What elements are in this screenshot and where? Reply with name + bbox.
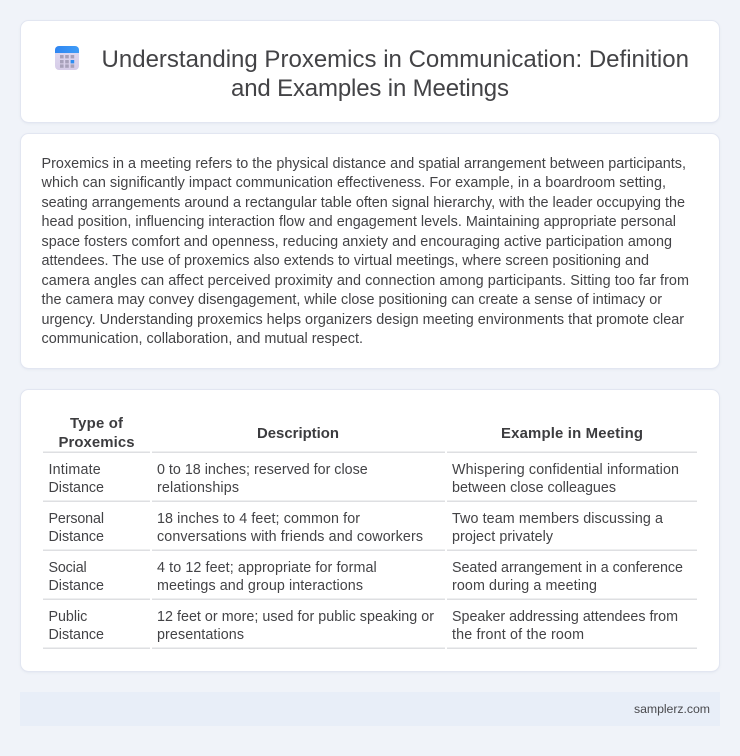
table header row: Proxemics [58,435,134,451]
table row: personal distance: Personal [48,511,104,527]
table row: personal distance: Distance [48,529,104,545]
table header row: Type of [70,416,123,432]
text block: introduction paragraph: the camera may convey disengagement, while close positioning can create a sense of intimacy or [42,292,662,308]
table row: public distance: Distance [48,627,104,643]
text block: introduction paragraph [40,156,689,347]
text block: introduction paragraph: head position, influencing interaction flow and engagement levels. Maintaining appropriate personal [42,214,676,230]
table row: public distance: the front of the room [452,627,584,643]
table row: public distance: Speaker addressing attendees from [452,609,678,625]
table row: social distance: room during a meeting [452,578,597,594]
table row: public distance: Public [48,609,87,625]
title [102,46,689,102]
table row: personal distance: Two team members discussing a [452,511,663,527]
table row: intimate distance: 0 to 18 inches; reserved for close [157,462,368,478]
panel: introduction [20,134,720,368]
text block: introduction paragraph: urgency. Understanding proxemics helps organizers design meeting environments that promote clear [42,312,684,328]
table row: social distance: 4 to 12 feet; appropriate for formal [157,560,377,576]
text block: introduction paragraph: communication, collaboration, and mutual respect. [42,331,363,347]
table row: social distance: Social [48,560,87,576]
title: Understanding Proxemics in Communication: Definition [102,46,689,73]
table row: public distance [43,609,697,649]
icon: calendar [55,46,79,70]
panel: proxemics table [20,390,720,672]
text block: introduction paragraph: camera angles can affect perceived proximity and connection among participants. Sitting too far from [42,273,689,289]
title: and Examples in Meetings [231,75,509,102]
text block: introduction paragraph: attendees. The use of proxemics also extends to virtual meetings, where screen positioning and [42,253,649,269]
footer text: source site: samplerz.com [634,702,710,716]
table header row [43,416,697,453]
text block: introduction paragraph: space fosters comfort and openness, reducing anxiety and encouraging active participation among [42,234,672,250]
table row: personal distance [43,511,697,551]
table header row: Example in Meeting [501,426,643,442]
table row: social distance [43,560,697,600]
table row: intimate distance: between close colleagues [452,480,616,496]
panel: header [20,20,720,122]
table row: social distance: Distance [48,578,104,594]
table row: intimate distance: Distance [48,480,104,496]
table row: personal distance: conversations with friends and coworkers [157,529,423,545]
footer [20,692,720,726]
table row: intimate distance: Intimate [48,462,101,478]
text block: introduction paragraph: seating arrangements around a rectangular table often signal hierarchy, with the leader occupying the [42,195,685,211]
table row: intimate distance: Whispering confidential information [452,462,679,478]
table row: social distance: Seated arrangement in a conference [452,560,683,576]
table row: personal distance: 18 inches to 4 feet; common for [157,511,360,527]
table header row: Description [257,426,339,442]
table row: personal distance: project privately [452,529,554,545]
table row: social distance: meetings and group interactions [157,578,363,594]
table row: intimate distance [43,462,697,502]
table row: public distance: presentations [157,627,244,643]
text block: introduction paragraph: which can significantly impact communication effectiveness. For example, in a boardroom setting, [40,175,666,191]
text block: introduction paragraph: Proxemics in a meeting refers to the physical distance and spatial arrangement between participants, [42,156,686,172]
table row: public distance: 12 feet or more; used for public speaking or [157,609,434,625]
table row: intimate distance: relationships [157,480,239,496]
